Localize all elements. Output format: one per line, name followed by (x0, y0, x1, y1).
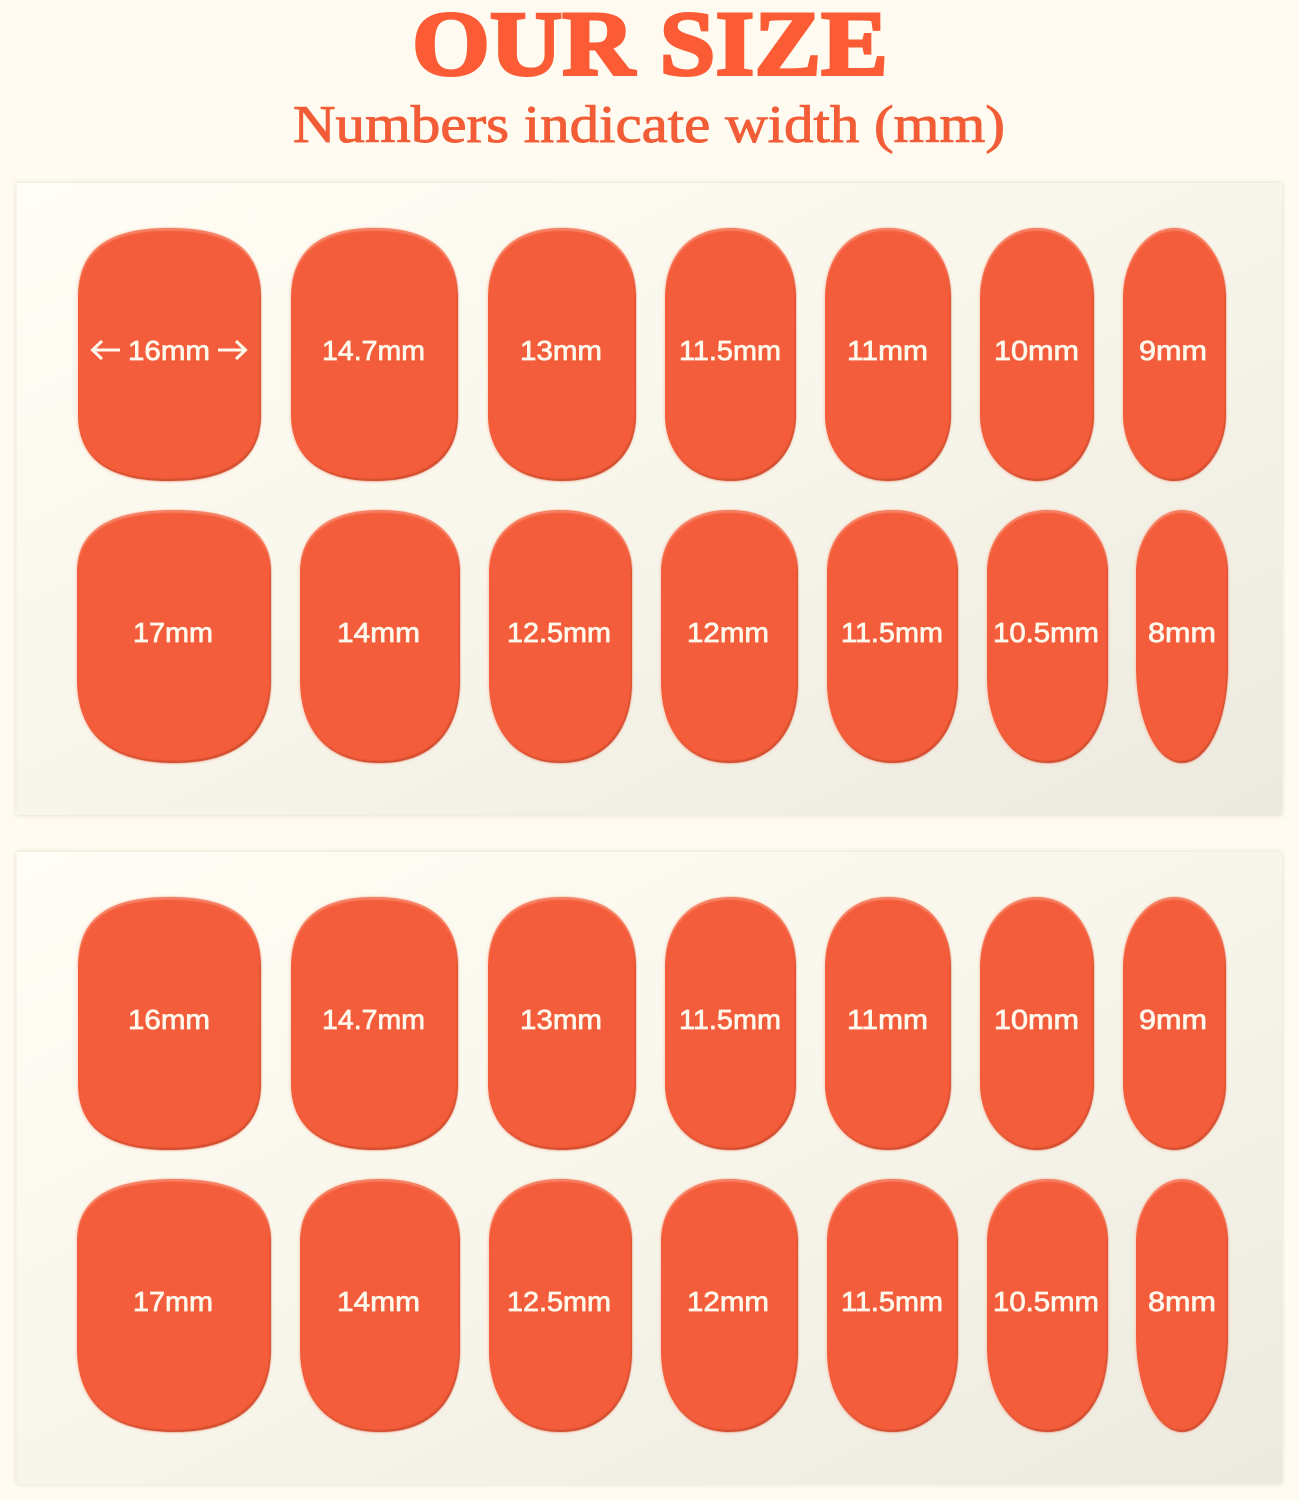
nail 17mm (77, 1179, 271, 1432)
nail 11mm (825, 897, 951, 1150)
nail 10.5mm: 10.5mm (993, 1286, 1099, 1317)
nail 12.5mm: 12.5mm (507, 617, 611, 648)
nail 16mm with width arrows: 16mm (128, 335, 210, 366)
nail 9mm: 9mm (1139, 1004, 1207, 1035)
nail 11mm (825, 228, 951, 481)
nail 11.5mm (827, 510, 958, 763)
nail 8mm (1136, 1179, 1228, 1432)
nail 11.5mm (827, 1179, 958, 1432)
nail 13mm: 13mm (520, 335, 602, 366)
nail 11mm: 11mm (847, 335, 928, 366)
nail 10mm: 10mm (994, 1004, 1079, 1035)
nail 12.5mm: 12.5mm (507, 1286, 611, 1317)
nail 13mm: 13mm (520, 1004, 602, 1035)
nail 10.5mm (987, 510, 1108, 763)
nail 10mm (980, 228, 1094, 481)
nail 12.5mm (489, 510, 632, 763)
subtitle: Numbers indicate width (mm) (293, 96, 1005, 154)
nail 16mm: 16mm (128, 1004, 210, 1035)
nail 14mm (300, 510, 460, 763)
nail 14mm: 14mm (337, 1286, 420, 1317)
nail 10.5mm (987, 1179, 1108, 1432)
nail 9mm: 9mm (1139, 335, 1207, 366)
panel: size set two (16, 852, 1282, 1484)
nail 17mm (77, 510, 271, 763)
nail 14.7mm (291, 228, 458, 481)
nail 16mm with width arrows (78, 228, 261, 481)
nail 14.7mm: 14.7mm (322, 335, 425, 366)
nail 13mm (488, 228, 636, 481)
nail 14mm: 14mm (337, 617, 420, 648)
nail 10.5mm: 10.5mm (993, 617, 1099, 648)
nail 16mm (78, 897, 261, 1150)
nail 12mm: 12mm (687, 617, 769, 648)
nail 12mm: 12mm (687, 1286, 769, 1317)
nail 17mm: 17mm (133, 1286, 213, 1317)
nail 11.5mm (665, 897, 796, 1150)
nail 14mm (300, 1179, 460, 1432)
nail 8mm: 8mm (1148, 617, 1216, 648)
panel: size set one (16, 183, 1282, 815)
nail 9mm (1123, 897, 1226, 1150)
nail 12.5mm (489, 1179, 632, 1432)
nail 11mm: 11mm (847, 1004, 928, 1035)
nail 8mm (1136, 510, 1228, 763)
nail 17mm: 17mm (133, 617, 213, 648)
nail 11.5mm: 11.5mm (841, 617, 943, 648)
nail 14.7mm: 14.7mm (322, 1004, 425, 1035)
nail 14.7mm (291, 897, 458, 1150)
nail 10mm: 10mm (994, 335, 1079, 366)
nail 12mm (661, 510, 798, 763)
nail 11.5mm (665, 228, 796, 481)
nail 13mm (488, 897, 636, 1150)
nail 12mm (661, 1179, 798, 1432)
nail 8mm: 8mm (1148, 1286, 1216, 1317)
nail 10mm (980, 897, 1094, 1150)
nail 9mm (1123, 228, 1226, 481)
nail 11.5mm: 11.5mm (679, 1004, 781, 1035)
nail 11.5mm: 11.5mm (841, 1286, 943, 1317)
nail 11.5mm: 11.5mm (679, 335, 781, 366)
